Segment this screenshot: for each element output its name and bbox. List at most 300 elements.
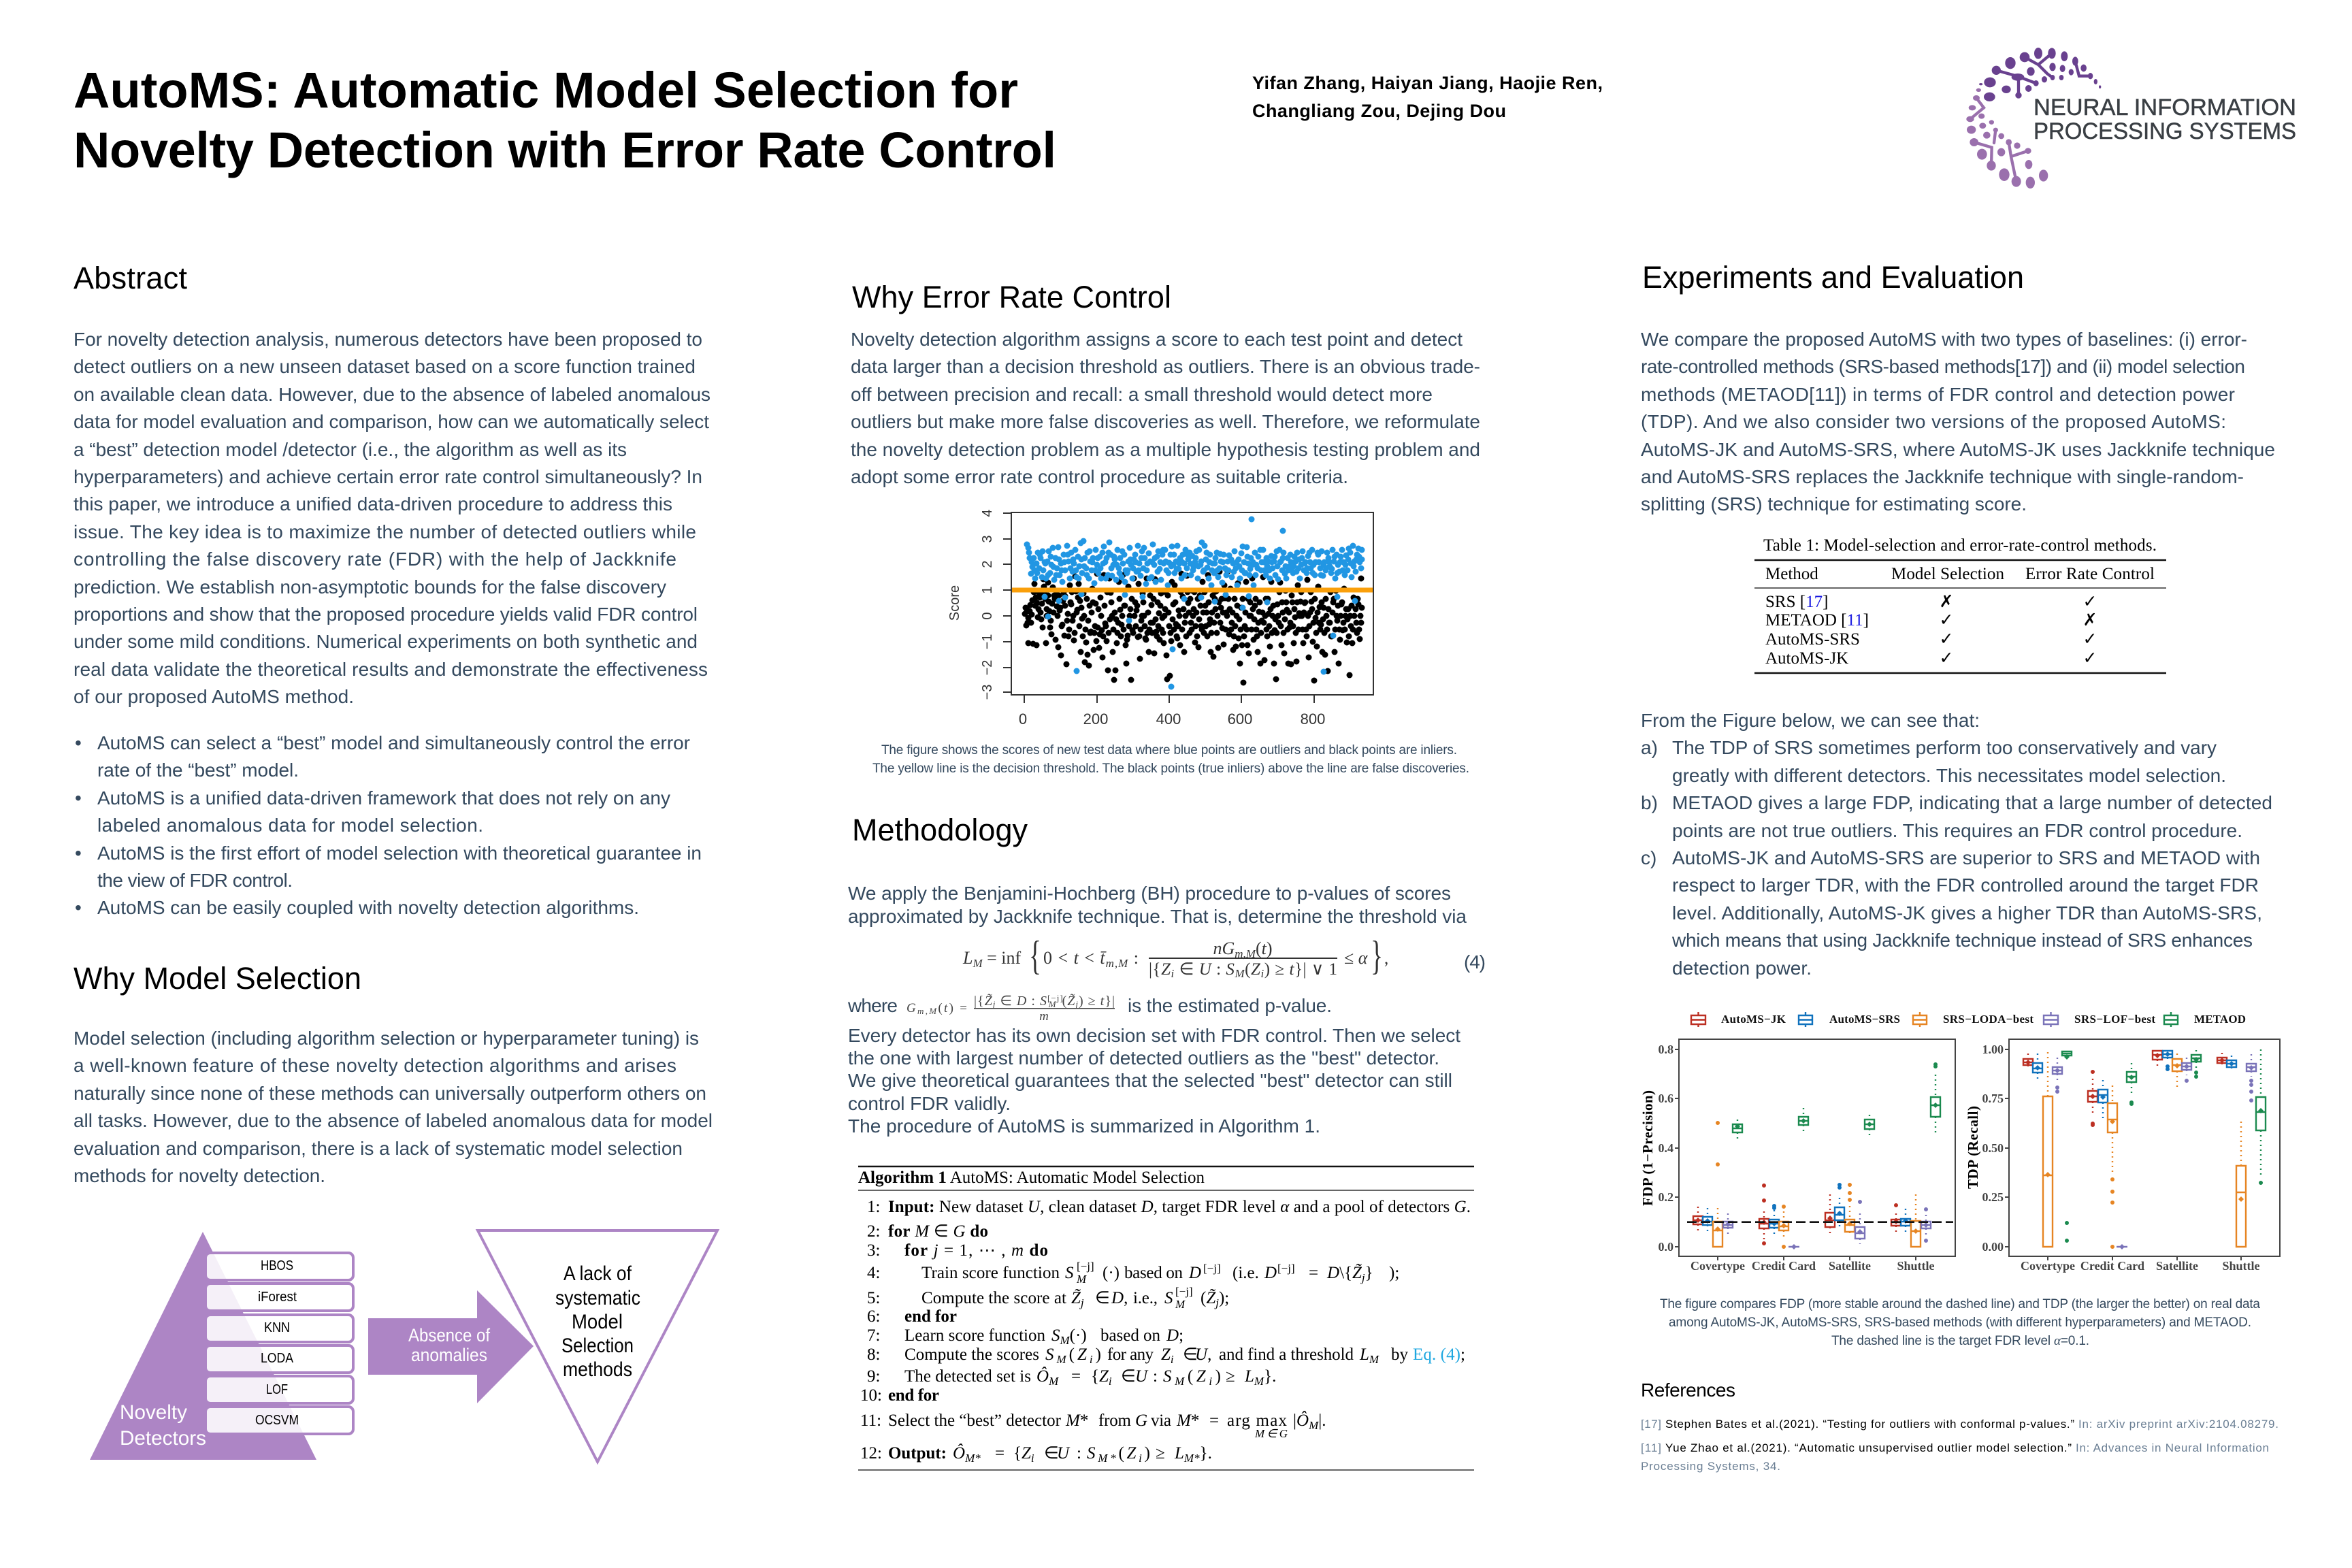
pyramid label xyxy=(120,1401,206,1450)
algorithm heading: Algorithm 1 AutoMS: Automatic Model Selection xyxy=(858,1169,1205,1187)
y axis labels: −1 xyxy=(980,634,995,649)
table rows: ✓ xyxy=(2083,629,2097,649)
step 9: ( xyxy=(1188,1367,1193,1386)
bullet list: AutoMS contributions xyxy=(75,732,702,918)
text block: error rate control body xyxy=(851,329,1480,487)
bullet list: AutoMS contributions: rate of the “best” model. xyxy=(97,760,299,781)
step 12 xyxy=(888,1443,1212,1465)
step 11: |. xyxy=(1318,1411,1326,1430)
panel: abstract xyxy=(74,261,710,918)
step 7: M xyxy=(1059,1334,1070,1347)
reference list xyxy=(1641,1418,2278,1473)
chart legend: METAOD xyxy=(2194,1013,2246,1026)
text block: why model selection body: methods for novelty detection. xyxy=(74,1165,325,1186)
icon: droplet arc xyxy=(1966,48,2101,189)
target FDR dashed line xyxy=(1687,1221,1953,1223)
text block: where clause with p-value formula: |{Z̃ xyxy=(974,994,992,1009)
inverted triangle: lack of methods: methods xyxy=(563,1358,632,1381)
text block: where clause with p-value formula: m,M xyxy=(917,1006,937,1016)
step 11: = xyxy=(1209,1411,1219,1430)
title: AutoMS: Automatic Model Selection for xyxy=(74,62,1018,118)
table rows: ✓ xyxy=(2083,591,2097,611)
TDP axis labels: TDP (Recall) xyxy=(1965,1106,1981,1189)
algorithm line numbers: 1: xyxy=(867,1198,880,1216)
detector list: KNN xyxy=(264,1320,290,1335)
text block: where clause with p-value formula: ( xyxy=(938,1001,943,1015)
equation number: (4) xyxy=(1464,951,1486,973)
algorithm line numbers: 11: xyxy=(860,1411,881,1430)
bullet list: AutoMS contributions: • xyxy=(75,732,82,753)
algorithm line numbers: 9: xyxy=(867,1367,880,1386)
text block: abstract body: data for model evaluation and comparison, how can we automatically select xyxy=(74,411,709,432)
FDP axis labels xyxy=(1639,1043,1935,1273)
text block: why model selection body: a well-known feature of these novelty detection algorithms and arises xyxy=(74,1055,676,1076)
step 4: based on xyxy=(1124,1264,1183,1282)
step 7: D; xyxy=(1166,1326,1183,1345)
TDP axis labels: Shuttle xyxy=(2222,1259,2260,1273)
text block: abstract body: For novelty detection analysis, numerous detectors have been proposed to xyxy=(74,329,702,350)
detector list: LODA xyxy=(261,1351,294,1366)
equation 4: t}| ∨ 1 xyxy=(1289,960,1337,979)
text block: why model selection body xyxy=(74,1028,713,1186)
y axis labels: −3 xyxy=(980,685,995,700)
step 4: (·) xyxy=(1102,1264,1120,1282)
text block: findings list: From the Figure below, we can see that: xyxy=(1641,710,1980,731)
boxes: AutoMS-JK xyxy=(1693,1186,1901,1243)
text block: why model selection body: naturally since none of these methods can universally outperform others on xyxy=(74,1083,706,1104)
reference list: [17] xyxy=(1641,1418,1661,1431)
step 4: [−j] xyxy=(1077,1260,1094,1273)
boxes: SRS-LOF-best xyxy=(1723,1202,1931,1250)
step 8 xyxy=(904,1345,1465,1366)
text block: findings list: AutoMS-JK and AutoMS-SRS are superior to SRS and METAOD with xyxy=(1672,847,2260,868)
text block: where clause with p-value formula: j xyxy=(992,999,996,1009)
detector list: HBOS xyxy=(261,1258,293,1273)
text block: findings list: level. Additionally, AutoMS-JK gives a higher TDR than AutoMS-SRS, xyxy=(1672,902,2262,924)
algorithm line numbers: 4: xyxy=(867,1264,880,1282)
FDP axis labels: 0.0 xyxy=(1658,1240,1673,1254)
y axis labels: 0 xyxy=(980,612,995,620)
detector list xyxy=(206,1253,353,1434)
table rows: ✗ xyxy=(2083,610,2097,630)
TDP axis labels: 0.75 xyxy=(1982,1092,2004,1105)
arrow: absence of anomalies: anomalies xyxy=(411,1345,487,1365)
boxes: AutoMS-SRS xyxy=(2033,1051,2236,1121)
table rows xyxy=(1765,591,2097,668)
text block: selection explanation: We give theoretical guarantees that the selected "best" detector can still xyxy=(848,1070,1452,1091)
plot frame and ticks xyxy=(1003,512,1373,703)
algorithm line numbers xyxy=(860,1198,882,1463)
heading: experiments and evaluation: Experiments and Evaluation xyxy=(1642,260,2024,295)
text block: abstract body: controlling the false discovery rate (FDR) with the help of Jackknife xyxy=(74,549,676,570)
boxes: SRS-LOF-best xyxy=(2053,1054,2256,1250)
detector list: OCSVM xyxy=(255,1413,299,1428)
table 1: methods xyxy=(1754,536,2166,673)
step 8: for any xyxy=(1107,1345,1154,1364)
FDP axis labels: 0.2 xyxy=(1658,1190,1673,1204)
heading: methodology: Methodology xyxy=(852,813,1028,847)
step 11: M* xyxy=(1065,1411,1088,1430)
bullet list: AutoMS contributions: AutoMS can select a “best” model and simultaneously control the error xyxy=(97,732,690,753)
text block: experiments intro: We compare the proposed AutoMS with two types of baselines: (i) error- xyxy=(1641,329,2247,350)
equation 4: } xyxy=(1371,933,1383,978)
step 12: i xyxy=(1139,1452,1142,1465)
text block: abstract body: proportions and show that the proposed procedure yields valid FDR control xyxy=(74,604,698,625)
FDP axis labels: Credit Card xyxy=(1752,1259,1816,1273)
equation 4: |{Z xyxy=(1149,960,1171,979)
step 12: Output: xyxy=(888,1444,947,1463)
table rows: METAOD [11] xyxy=(1765,611,1869,630)
text block: error rate control body: off between precision and recall: a small threshold would detect more xyxy=(851,384,1433,405)
reference list: Yue Zhao et al.(2021). “Automatic unsupervised outlier model selection.” xyxy=(1665,1441,2072,1454)
reference list: Processing Systems, 34. xyxy=(1641,1460,1780,1473)
table rows: ✓ xyxy=(1940,629,1953,649)
text block: error rate control body: the novelty detection problem as a multiple hypothesis testing problem and xyxy=(851,439,1480,460)
x axis labels: 0 xyxy=(1019,710,1027,728)
step 11: M xyxy=(1308,1419,1319,1432)
step 8: Z xyxy=(1161,1345,1171,1364)
equation 4: U : S xyxy=(1199,960,1235,979)
bullet list: AutoMS contributions: labeled anomalous data for model selection. xyxy=(97,815,483,836)
boxes: AutoMS-SRS xyxy=(1703,1185,1910,1237)
text block: findings list: METAOD gives a large FDP, indicating that a large number of detected xyxy=(1672,792,2272,813)
boxes: SRS-LODA-best xyxy=(1713,1123,1921,1247)
algorithm steps xyxy=(888,1198,1471,1465)
blue outlier points xyxy=(1027,519,1362,687)
step 4: ); xyxy=(1389,1264,1399,1282)
step 4: [−j] xyxy=(1277,1262,1295,1275)
text block: findings list: which means that using Jackknife technique instead of SRS enhances xyxy=(1671,930,2253,951)
equation 4: 0 < t < t̄ xyxy=(1043,948,1105,968)
pyramid label: Detectors xyxy=(120,1427,206,1450)
FDP axis labels: 0.4 xyxy=(1658,1141,1673,1155)
equation 4: i xyxy=(1171,967,1175,980)
algorithm steps: for j = 1, ⋯ , m do xyxy=(904,1241,1048,1260)
step 9: i xyxy=(1109,1375,1112,1388)
step 9: = xyxy=(1071,1367,1081,1386)
step 9: ) xyxy=(1215,1367,1221,1386)
step 4: j xyxy=(1360,1271,1365,1284)
step 5: D, xyxy=(1111,1289,1128,1307)
step 9: The detected set is xyxy=(904,1367,1031,1386)
authors: Changliang Zou, Dejing Dou xyxy=(1252,101,1506,121)
bullet list: AutoMS contributions: AutoMS is a unified data-driven framework that does not rely on any xyxy=(97,787,670,808)
chart legend: SRS−LOF−best xyxy=(2074,1013,2155,1026)
reference list: Stephen Bates et al.(2021). “Testing for outliers with conformal p-values.” xyxy=(1665,1418,2074,1431)
text block: where clause with p-value formula: j xyxy=(1074,999,1078,1009)
FDP axis labels: Shuttle xyxy=(1897,1259,1935,1273)
x axis labels: 400 xyxy=(1156,710,1181,728)
text block: experiments intro: (TDP). And we also consider two versions of the proposed AutoMS: xyxy=(1641,411,2226,432)
pyramid label: Novelty xyxy=(120,1401,187,1424)
text block: abstract body: this paper, we introduce a unified data-driven procedure to address this xyxy=(74,493,672,514)
text block: BH procedure intro: We apply the Benjamini-Hochberg (BH) procedure to p-values of scores xyxy=(848,883,1451,904)
step 12: L xyxy=(1174,1444,1184,1463)
reference list: In: arXiv preprint arXiv:2104.08279. xyxy=(2078,1418,2278,1431)
boxes: SRS-LODA-best xyxy=(2043,1052,2246,1247)
step 8: i xyxy=(1090,1353,1093,1366)
equation 4: Z xyxy=(1251,960,1261,979)
text block: selection explanation: The procedure of AutoMS is summarized in Algorithm 1. xyxy=(848,1115,1320,1137)
equation 4: m,M xyxy=(1235,947,1256,960)
text block: experiments intro: AutoMS-JK and AutoMS-SRS, where AutoMS-JK uses Jackknife technique xyxy=(1641,439,2275,460)
bullet list: AutoMS contributions: • xyxy=(75,843,82,864)
equation 4: ( xyxy=(1256,938,1262,958)
step 12: S xyxy=(1087,1444,1096,1463)
step 12: U xyxy=(1057,1444,1071,1463)
step 4: S xyxy=(1065,1264,1074,1282)
step 9: }. xyxy=(1264,1367,1276,1386)
step 11: Select the “best” detector xyxy=(888,1411,1062,1430)
boxes: METAOD xyxy=(1733,1064,1940,1141)
step 5: [−j] xyxy=(1175,1285,1193,1298)
inverted triangle: lack of methods: Selection xyxy=(561,1335,634,1357)
y axis labels: Score xyxy=(947,585,962,621)
step 11: from xyxy=(1098,1411,1132,1430)
threshold line xyxy=(1011,588,1373,592)
step 9: : xyxy=(1153,1367,1158,1386)
TDP axis labels: Credit Card xyxy=(2080,1259,2144,1273)
step 9: M xyxy=(1254,1375,1264,1388)
text block: where clause with p-value formula: Z̃ xyxy=(1067,993,1075,1009)
table header xyxy=(1754,565,2166,588)
algorithm rules xyxy=(858,1166,1474,1167)
step 4: } xyxy=(1365,1264,1373,1282)
chart legend: SRS−LODA−best xyxy=(1943,1013,2034,1026)
table rows: SRS [17] xyxy=(1765,593,1828,611)
caption: boxplot figure xyxy=(1660,1297,2260,1348)
text block: findings list: respect to larger TDR, with the FDR controlled around the target FDR xyxy=(1672,875,2259,896)
bullet list: AutoMS contributions: • xyxy=(75,787,82,808)
table caption: Table 1: Model-selection and error-rate-control methods. xyxy=(1763,536,2157,555)
step 4: (i.e. xyxy=(1232,1264,1259,1282)
step 8: S xyxy=(1045,1345,1054,1364)
logo: Neural Information Processing Systems xyxy=(1966,48,2296,189)
equation 4: M xyxy=(1234,967,1245,980)
algorithm header rule xyxy=(858,1190,1474,1470)
FDP axis labels: Covertype xyxy=(1690,1259,1745,1273)
y axis labels xyxy=(947,509,995,700)
text block: error rate control body: adopt some error rate control procedure as suitable criteria. xyxy=(851,466,1348,487)
text block: where clause with p-value formula: ∈ xyxy=(996,994,1016,1009)
equation 4: { xyxy=(1029,933,1041,978)
x axis labels xyxy=(1019,710,1325,728)
algorithm line numbers: 8: xyxy=(867,1345,880,1364)
authors xyxy=(1252,73,1603,121)
step 12: ≥ xyxy=(1156,1444,1165,1463)
TDP axis labels: 0.00 xyxy=(1982,1240,2004,1254)
plot frame xyxy=(1675,1039,1955,1260)
text block: where clause with p-value formula: m xyxy=(1039,1009,1049,1024)
step 9: ∈ xyxy=(1121,1367,1136,1386)
step 4: D\{Z̃ xyxy=(1327,1264,1362,1282)
equation 4: ≤ α xyxy=(1344,948,1369,968)
step 9: U xyxy=(1135,1367,1149,1386)
title xyxy=(74,62,1056,178)
step 8: ( xyxy=(1069,1345,1075,1364)
text block: selection explanation: control FDR validly. xyxy=(848,1093,1011,1114)
step 8: L xyxy=(1359,1345,1369,1364)
text block: error rate control body: Novelty detection algorithm assigns a score to each test point and detect xyxy=(851,329,1463,350)
equation 4: ∈ xyxy=(1175,960,1198,979)
bullet list: AutoMS contributions: AutoMS can be easily coupled with novelty detection algorithms. xyxy=(97,897,639,918)
step 11 xyxy=(888,1411,1326,1440)
equation 4: = inf xyxy=(983,948,1022,968)
caption: scatter plot: The yellow line is the decision threshold. The black points (true inliers) above the line are false discoveries. xyxy=(872,762,1469,776)
table rows: ✗ xyxy=(1940,591,1953,611)
text block: experiments intro: methods (METAOD[11]) in terms of FDR control and detection power xyxy=(1641,384,2235,405)
step 9: S xyxy=(1163,1367,1172,1386)
step 12: }. xyxy=(1200,1444,1212,1463)
chart legend: AutoMS−JK xyxy=(1721,1013,1786,1026)
text block: findings list: c) xyxy=(1641,847,1656,868)
TDP axis labels: 1.00 xyxy=(1982,1043,2004,1056)
text block: abstract body: hyperparameters) and achieve certain error rate control simultaneously? In xyxy=(74,466,702,487)
step 9: Ô xyxy=(1036,1367,1049,1386)
step 7: based on xyxy=(1100,1326,1161,1345)
detector list: iForest xyxy=(258,1290,297,1305)
step 5: ); xyxy=(1219,1289,1229,1307)
step 11: M* xyxy=(1176,1411,1199,1430)
step 7: Learn score function xyxy=(904,1326,1045,1345)
TDP axis labels: 0.25 xyxy=(1982,1190,2004,1204)
step 5: j xyxy=(1079,1296,1084,1309)
step 8: and find a threshold xyxy=(1219,1345,1354,1364)
step 9: M xyxy=(1174,1375,1185,1388)
step 11: arg max xyxy=(1227,1411,1288,1430)
pyramid: novelty detectors xyxy=(90,1232,316,1460)
bullet list: AutoMS contributions: AutoMS is the first effort of model selection with theoretical guarantee in xyxy=(97,843,702,864)
text block: BH procedure intro: approximated by Jackknife technique. That is, determine the threshold via xyxy=(848,906,1467,927)
panel: methodology xyxy=(847,813,1486,1470)
algorithm steps: Input: New dataset U, clean dataset D, target FDR level α and a pool of detectors G. xyxy=(888,1198,1471,1216)
step 9: Z xyxy=(1196,1367,1207,1386)
table rows: ✓ xyxy=(1940,648,1953,668)
logo wordmark xyxy=(2034,95,2296,144)
x axis labels: 600 xyxy=(1228,710,1252,728)
text block: experiments intro: splitting (SRS) technique for estimating score. xyxy=(1641,493,2027,514)
text block: findings list: The TDP of SRS sometimes perform too conservatively and vary xyxy=(1672,737,2217,758)
equation 4: L xyxy=(962,948,973,968)
text block: abstract body: prediction. We establish non-asymptotic bounds for the false discovery xyxy=(74,576,666,598)
text block: findings list: a) xyxy=(1641,737,1658,758)
table header: Error Rate Control xyxy=(2025,565,2155,583)
text block: where clause with p-value formula: G xyxy=(906,1001,916,1015)
heading: why model selection: Why Model Selection xyxy=(74,961,361,996)
equation 4: ( xyxy=(1245,960,1250,979)
TDP axis labels: Satellite xyxy=(2156,1259,2198,1273)
step 5: ∈ xyxy=(1095,1289,1110,1307)
step 4: D xyxy=(1264,1264,1277,1282)
step 11: via xyxy=(1151,1411,1171,1430)
step 4: M xyxy=(1076,1273,1087,1286)
step 8: Compute the scores xyxy=(904,1345,1039,1364)
panel: experiments and evaluation xyxy=(1639,260,2280,1348)
text block: error rate control body: outliers but make more false discoveries as well. Therefore, we reformulate xyxy=(851,411,1480,432)
step 12: i xyxy=(1031,1452,1034,1465)
text block: BH procedure intro xyxy=(848,883,1467,927)
table rules xyxy=(1754,560,2166,673)
step 11: |Ô xyxy=(1293,1411,1309,1430)
step 8: ∈ xyxy=(1183,1345,1198,1364)
equation 4: : xyxy=(1128,948,1139,968)
text block: selection explanation: Every detector has its own decision set with FDR control. Then we select xyxy=(848,1025,1460,1046)
step 11: G xyxy=(1135,1411,1147,1430)
step 12: {Z xyxy=(1013,1444,1031,1463)
step 8: ) xyxy=(1096,1345,1101,1364)
FDP axis labels: FDP (1−Precision) xyxy=(1639,1090,1656,1206)
black inlier points xyxy=(1025,572,1362,683)
step 5: (Z̃ xyxy=(1200,1289,1215,1307)
text block: abstract body: on available clean data. However, due to the absence of labeled anomalous xyxy=(74,384,710,405)
logo wordmark: PROCESSING SYSTEMS xyxy=(2034,118,2296,144)
step 12: M* xyxy=(964,1452,981,1465)
step 12: = xyxy=(995,1444,1004,1463)
inverted triangle: lack of methods xyxy=(478,1230,717,1462)
step 4: [−j] xyxy=(1203,1262,1221,1275)
chart: FDP boxplot xyxy=(1639,1039,1955,1273)
text block: where clause with p-value formula: t}| xyxy=(1100,994,1115,1009)
text block: where clause with p-value formula: ) ≥ xyxy=(1079,994,1100,1009)
equation 4: i xyxy=(1260,967,1264,980)
step 7: (·) xyxy=(1070,1326,1087,1345)
step 4: D xyxy=(1188,1264,1201,1282)
step 5: M xyxy=(1175,1298,1186,1311)
panel: why model selection xyxy=(74,961,717,1462)
algorithm steps: end for xyxy=(904,1307,957,1326)
algorithm line numbers: 10: xyxy=(860,1386,882,1405)
text block: why model selection body: all tasks. However, due to the absence of labeled anomalous data for model xyxy=(74,1110,713,1131)
y axis labels: 4 xyxy=(980,509,995,517)
step 12: ( xyxy=(1118,1444,1124,1463)
equation 4 xyxy=(962,933,1388,980)
step 9: {Z xyxy=(1091,1367,1109,1386)
step 5: Z̃ xyxy=(1071,1289,1081,1307)
caption: scatter plot xyxy=(872,743,1469,776)
step 5: Compute the score at xyxy=(921,1289,1066,1307)
y axis labels: 3 xyxy=(980,535,995,543)
caption: scatter plot: The figure shows the scores of new test data where blue points are outliers and black points are inliers. xyxy=(881,743,1457,757)
scatter plot: test scores xyxy=(947,509,1373,728)
step 9: i xyxy=(1209,1375,1212,1388)
reference list: [11] xyxy=(1641,1441,1661,1454)
step 8: i xyxy=(1171,1353,1174,1366)
plot frame xyxy=(2005,1039,2280,1260)
step 7: S xyxy=(1051,1326,1060,1345)
algorithm steps: for M ∈ G do xyxy=(888,1222,988,1241)
step 4: = xyxy=(1309,1264,1318,1282)
step 12: M* xyxy=(1097,1452,1116,1465)
text block: abstract body: under some mild conditions. Numerical experiments on both synthetic and xyxy=(74,631,698,652)
equation 4: M xyxy=(972,957,983,970)
step 8: by xyxy=(1391,1345,1409,1364)
text block: where clause with p-value formula: where xyxy=(847,995,898,1016)
step 8: Z xyxy=(1077,1345,1088,1364)
equation 4: t) xyxy=(1262,938,1273,958)
chart legend xyxy=(1691,1012,2246,1027)
bullet list: AutoMS contributions: the view of FDR control. xyxy=(97,870,293,891)
reference list: In: Advances in Neural Information xyxy=(2076,1441,2269,1454)
panel: references xyxy=(1641,1379,2278,1473)
boxes: AutoMS-JK xyxy=(2023,1051,2227,1125)
inverted triangle: lack of methods: systematic xyxy=(555,1287,640,1309)
chart: TDP boxplot xyxy=(1965,1039,2280,1273)
text block: where clause with p-value formula: [−j] xyxy=(1047,993,1063,1003)
text block: experiments intro xyxy=(1641,329,2275,514)
step 8: U, xyxy=(1195,1345,1211,1364)
text block: abstract body: of our proposed AutoMS method. xyxy=(74,686,354,707)
caption: boxplot figure: The dashed line is the target FDR level α=0.1. xyxy=(1831,1334,2089,1348)
